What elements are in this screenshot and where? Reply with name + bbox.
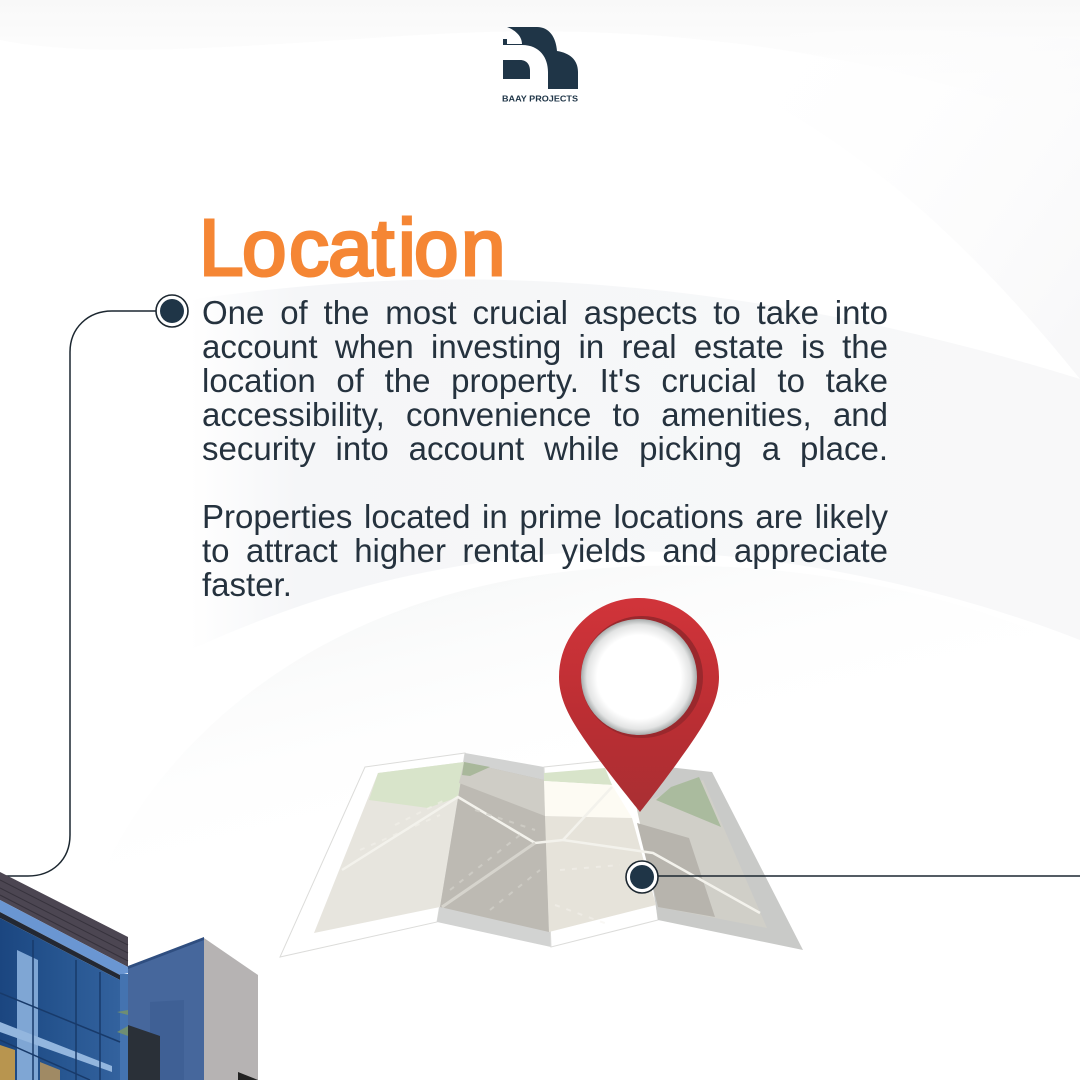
connector line: map marker to right edge [626, 861, 1080, 893]
foliage [117, 1010, 128, 1036]
map fold panel 3 [544, 757, 658, 947]
connector line: top-left marker to building [0, 295, 188, 876]
logo wordmark: BAAY PROJECTS [502, 94, 578, 104]
paragraph 1: accessibility, convenience to amenities, and [202, 396, 888, 433]
facade reflections [17, 950, 38, 1080]
building fascia [0, 900, 128, 975]
map illustration [280, 753, 803, 957]
map pin [559, 598, 719, 812]
body text [202, 294, 888, 603]
second building blue wall [128, 938, 204, 1080]
map printed surface [314, 762, 767, 933]
map block texture [360, 800, 620, 925]
paragraph 2 [202, 498, 888, 603]
paragraph 2: faster. [202, 566, 292, 603]
paragraph 1: One of the most crucial aspects to take into [202, 294, 888, 331]
paragraph 1: security into account while picking a place. [202, 430, 888, 467]
second building window [128, 1025, 160, 1080]
marker: text bullet [156, 295, 188, 327]
paragraph 1: account when investing in real estate is the [202, 328, 888, 365]
logo: Baay Projects [502, 27, 578, 104]
title: Location [199, 203, 506, 292]
building glass facade [0, 918, 120, 1080]
second building grey wall [204, 938, 258, 1080]
paragraph 2: Properties located in prime locations are likely [202, 498, 888, 535]
map roads [342, 787, 760, 913]
map fold panel 4 [633, 763, 803, 950]
building illustration [0, 872, 258, 1080]
building roof [0, 872, 128, 967]
map fold panel 2 [437, 753, 551, 947]
marker: map location [626, 861, 658, 893]
paragraph 1 [202, 294, 888, 467]
paragraph 1: location of the property. It's crucial to take [202, 362, 888, 399]
map fold panel 1 [280, 753, 465, 957]
logo mark [503, 27, 578, 89]
paragraph 2: to attract higher rental yields and appreciate [202, 532, 888, 569]
